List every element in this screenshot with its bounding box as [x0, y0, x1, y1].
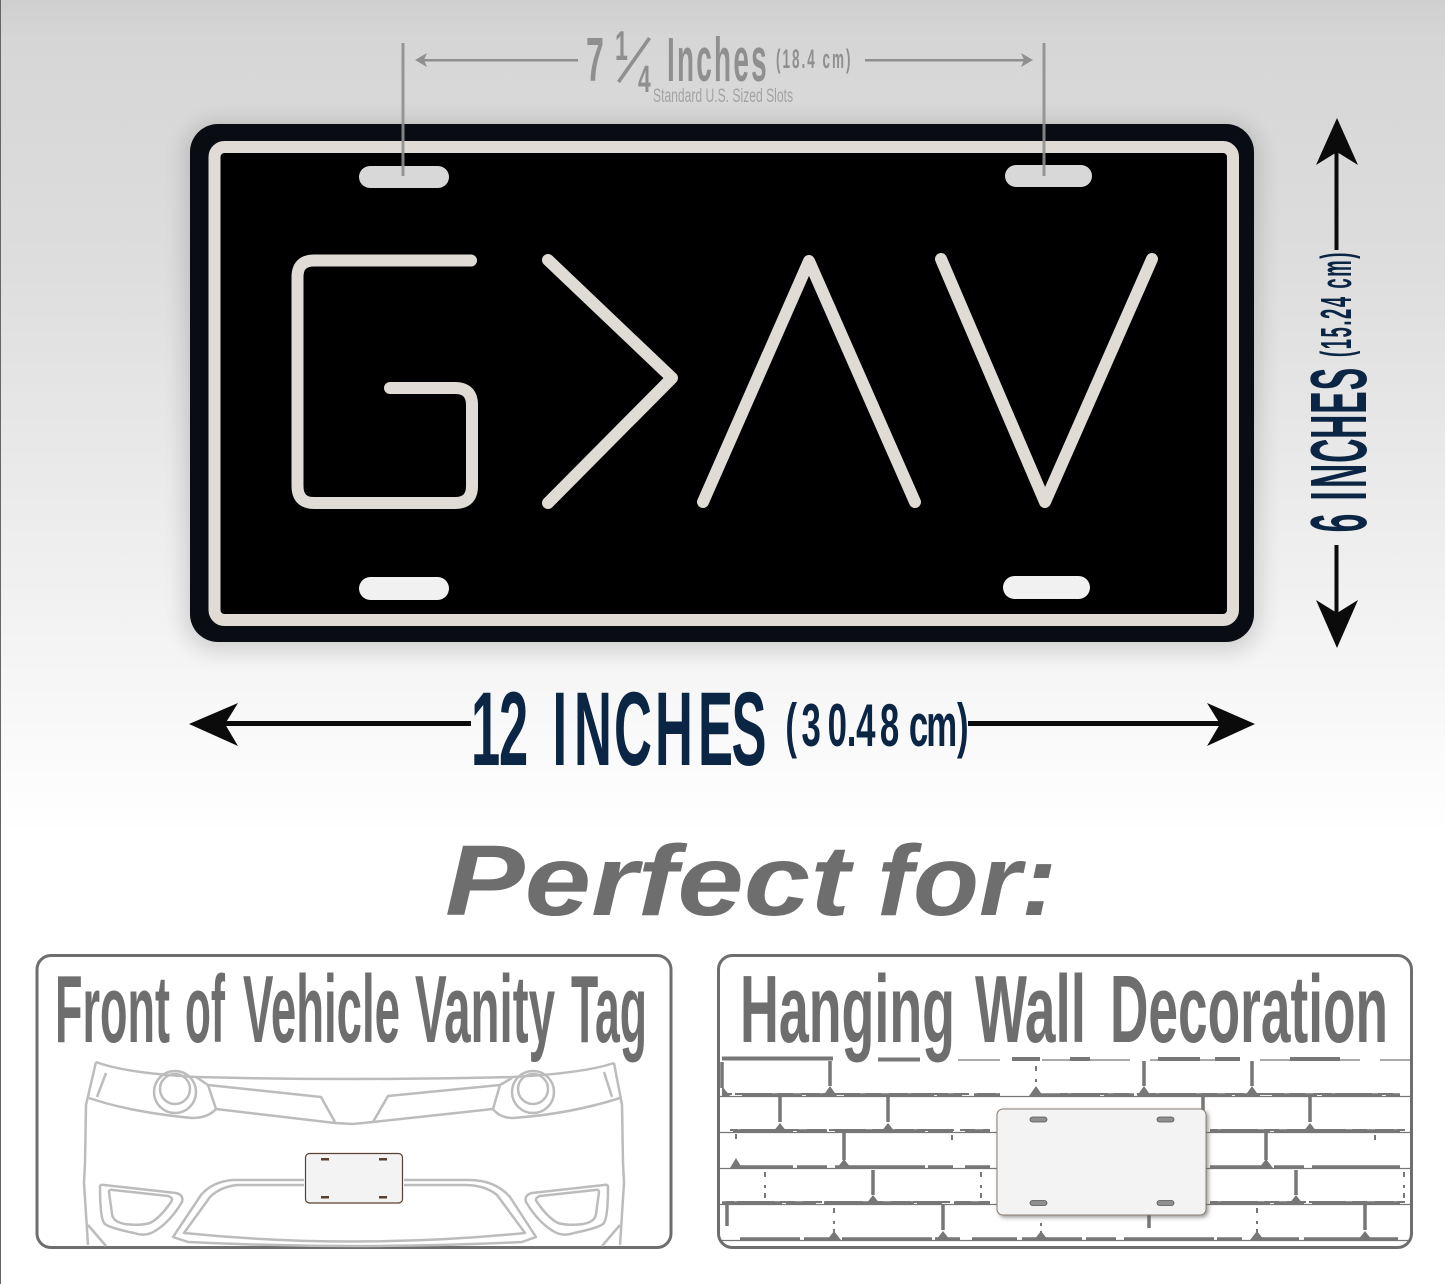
width dimension: 12 inches: (30.48 cm)	[785, 693, 969, 759]
wall joint ticks	[722, 1086, 1372, 1240]
heading: Perfect for	[445, 825, 1057, 937]
slot spacing dimension: 7 1/4 inches: (18.4 cm)	[776, 44, 852, 74]
panel title: Vehicle	[243, 956, 400, 1063]
panel: front of vehicle vanity tag	[37, 956, 671, 1248]
panel title	[740, 956, 1388, 1063]
panel title	[55, 956, 647, 1063]
slot spacing dimension: 7 1/4 inches: Inches	[667, 26, 769, 95]
width dimension: 12 inches: 12 INCHES	[471, 670, 767, 788]
slot spacing dimension: 7 1/4 inches	[402, 23, 1046, 176]
slot spacing dimension: 7 1/4 inches: 7	[586, 26, 604, 95]
license plate	[186, 124, 1258, 650]
plate body	[190, 124, 1254, 642]
plate lettering	[298, 259, 1152, 503]
panel title: Front	[55, 956, 170, 1063]
slot spacing dimension: 7 1/4 inches: 4	[638, 58, 651, 100]
panel title: Wall	[975, 956, 1086, 1063]
heading: Perfect for: for:	[877, 825, 1057, 937]
plate border	[214, 147, 1233, 620]
slot spacing dimension: 7 1/4 inches: Standard U.S. Sized Slots	[653, 86, 793, 107]
plate on car	[306, 1154, 402, 1203]
panel title: Vanity	[415, 956, 555, 1063]
car front line drawing	[84, 1062, 624, 1246]
panel title: of	[185, 956, 225, 1063]
slot spacing dimension: 7 1/4 inches: 1	[615, 23, 628, 70]
hanging blank plate	[997, 1109, 1206, 1215]
width dimension: 12 inches	[189, 670, 1255, 788]
height dimension: 6 inches: 6 INCHES	[1294, 368, 1384, 532]
panel title: Hanging	[740, 956, 955, 1063]
panel: front of vehicle vanity tag: Tag	[571, 956, 647, 1063]
panel: hanging wall decoration	[718, 956, 1412, 1248]
brick wall	[720, 1058, 1410, 1240]
mounting slots	[359, 165, 1092, 600]
height dimension: 6 inches	[1294, 118, 1384, 648]
heading: Perfect for: Perfect	[445, 825, 854, 937]
height dimension: 6 inches: (15.24 cm)	[1312, 251, 1361, 357]
